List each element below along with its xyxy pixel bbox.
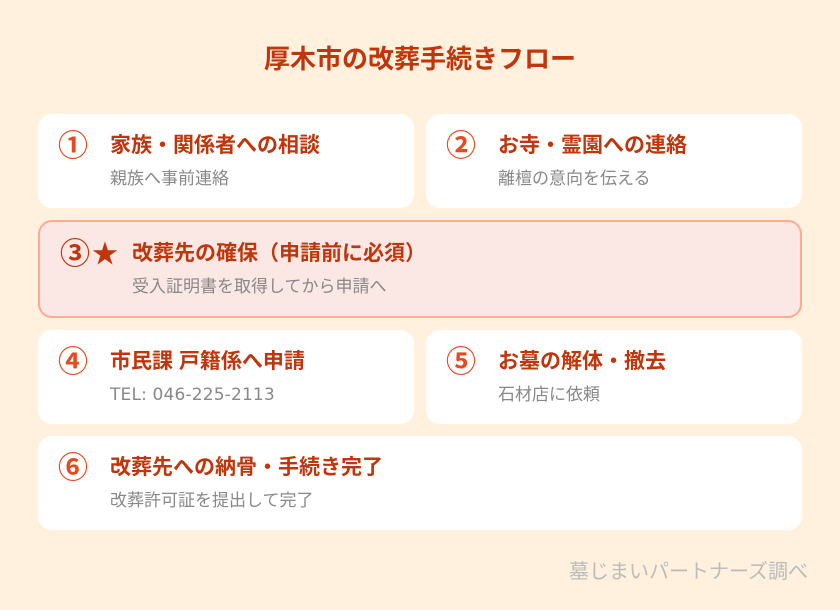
step 4 description: TEL: 046-225-2113 <box>110 385 275 405</box>
source note: 墓じまいパートナーズ調べ <box>569 561 808 583</box>
step 2 description: 離檀の意向を伝える <box>498 169 650 188</box>
step 5 description: 石材店に依頼 <box>498 385 600 404</box>
panel: step 4 <box>38 330 414 424</box>
step 4 number: ④ <box>58 346 88 379</box>
step 5 number: ⑤ <box>446 346 476 379</box>
step 6 number: ⑥ <box>58 452 88 485</box>
step 3 description: 受入証明書を取得してから申請へ <box>132 277 386 296</box>
panel: step 3 highlighted <box>38 220 802 318</box>
panel: step 1 <box>38 114 414 208</box>
step 6 description: 改葬許可証を提出して完了 <box>110 491 314 510</box>
step 3 number: ③ <box>60 238 90 271</box>
step 3 heading: 改葬先の確保（申請前に必須） <box>132 242 426 265</box>
step 2 number: ② <box>446 130 476 163</box>
panel: step 6 <box>38 436 802 530</box>
step 4 heading: 市民課 戸籍係へ申請 <box>110 350 305 373</box>
step 1 heading: 家族・関係者への相談 <box>110 134 320 157</box>
step 6 heading: 改葬先への納骨・手続き完了 <box>110 456 383 479</box>
step 5 heading: お墓の解体・撤去 <box>498 350 666 373</box>
panel: step 5 <box>426 330 802 424</box>
icon: star: ★ <box>92 239 118 269</box>
title: 厚木市の改葬手続きフロー <box>264 44 576 74</box>
step 1 number: ① <box>58 130 88 163</box>
step 2 heading: お寺・霊園への連絡 <box>498 134 687 157</box>
step 1 description: 親族へ事前連絡 <box>110 169 229 188</box>
panel: step 2 <box>426 114 802 208</box>
